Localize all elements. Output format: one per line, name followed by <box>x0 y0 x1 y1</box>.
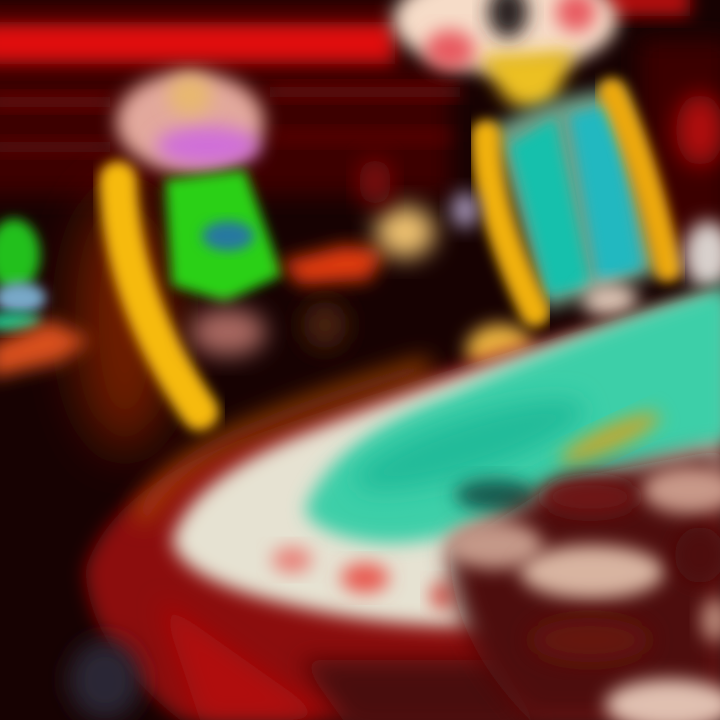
chip stacks <box>447 450 720 720</box>
teal striped column with yellow frame <box>486 90 668 312</box>
table: white edge <box>172 295 720 626</box>
table: red rim <box>85 290 720 720</box>
red ceiling band <box>0 0 690 64</box>
table: teal felt <box>305 285 720 543</box>
casino table <box>85 285 720 720</box>
foreground shadow <box>69 600 330 720</box>
mid-scene orange and cream lights <box>280 158 720 376</box>
clown face upper right <box>393 0 617 109</box>
far-left slot figure <box>0 219 90 378</box>
left slot figure <box>116 72 282 412</box>
table: red markers <box>272 547 312 573</box>
